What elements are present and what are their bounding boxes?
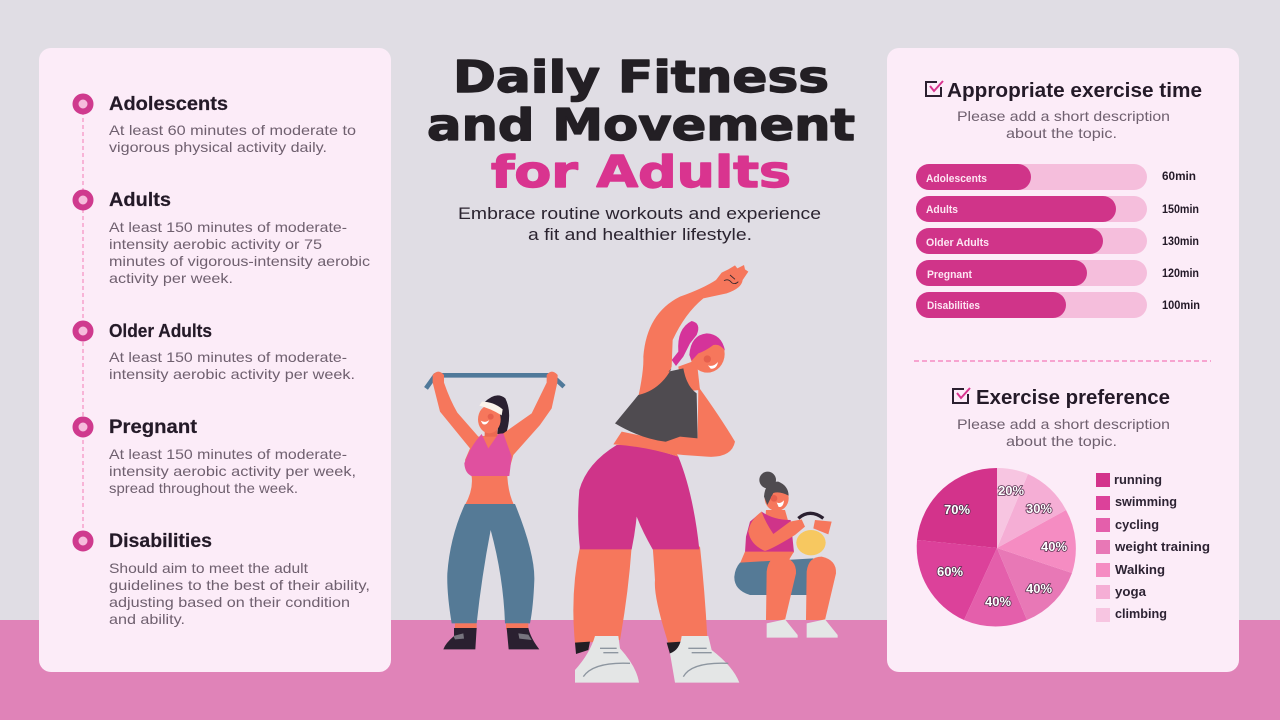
pie chart: exercise preference: 40% [985,594,1011,609]
guideline: Adults [76,190,370,286]
guideline: Pregnant: At least 150 minutes of moderate- [109,446,347,462]
description: exercise time: about the topic. [1006,125,1117,141]
guideline: Older Adults [76,321,355,382]
guideline: Pregnant: spread throughout the week. [109,480,298,496]
description: exercise time: Please add a short description [957,108,1170,124]
bar chart: exercise minutes: Pregnant [927,269,972,281]
guideline: Adults: minutes of vigorous-intensity aerobic [109,253,370,269]
guideline: Adolescents: Adolescents [109,94,228,115]
legend: exercise types: weight training [1114,539,1210,554]
guideline: Older Adults: intensity aerobic activity per week. [109,366,355,382]
guideline: Disabilities: guidelines to the best of their ability, [109,577,370,593]
guideline: Pregnant [76,417,356,496]
legend: exercise types: cycling [1115,517,1159,532]
pie chart: exercise preference: 40% [1041,539,1067,554]
figure: woman side-stretching [573,265,748,683]
guideline: Adults: activity per week. [109,270,233,286]
pie chart: exercise preference: 40% [1026,581,1052,596]
legend: exercise types: yoga [1115,584,1147,599]
bar chart: exercise minutes: Adolescents [926,173,987,185]
legend: exercise types [1096,472,1210,622]
description: exercise time [957,108,1170,141]
guideline: Disabilities: Should aim to meet the adult [109,560,308,576]
guideline: Disabilities: and ability. [109,611,185,627]
heading: appropriate exercise time: Appropriate exercise time [947,79,1202,102]
guideline: Pregnant: Pregnant [109,417,198,438]
guideline: Disabilities: Disabilities [109,531,212,552]
panel: right charts [887,48,1239,672]
bar chart: exercise minutes: Adults [926,204,958,216]
illustration: three women exercising [426,265,838,683]
figure: woman squatting with kettlebell [734,472,838,638]
bar chart: exercise minutes: Older Adults [926,237,989,249]
guideline: Adolescents: vigorous physical activity daily. [109,139,327,155]
bar chart: exercise minutes: 100min [1162,300,1200,312]
title: for Adults [491,147,791,198]
bar chart: exercise minutes: 120min [1162,268,1199,280]
guideline: Adults: Adults [109,190,171,211]
pie chart: exercise preference: 60% [937,564,963,579]
pie chart: exercise preference: 70% [944,502,970,517]
guideline: Older Adults: Older Adults [109,321,212,341]
guideline: Adults: intensity aerobic activity or 75 [109,236,322,252]
pie chart: exercise preference: 20% [998,483,1024,498]
guideline: Adolescents: At least 60 minutes of moderate to [109,122,356,138]
heading: exercise preference: Exercise preference [976,386,1170,409]
legend: exercise types: climbing [1115,606,1167,621]
guideline: Adolescents [76,94,356,155]
guideline: Disabilities [76,531,370,627]
figure: woman lifting a bar [426,372,564,649]
description: exercise preference: Please add a short description [957,416,1170,432]
bar chart: exercise minutes: 60min [1162,171,1196,183]
icon: checkbox [953,388,970,403]
title: Daily Fitness [453,52,829,103]
icon: checkbox [926,81,943,96]
guideline: Disabilities: adjusting based on their condition [109,594,350,610]
bar chart: exercise minutes: Disabilities [927,300,980,312]
bar chart: exercise minutes: 150min [1162,204,1199,216]
legend: exercise types: Walking [1115,562,1165,577]
subtitle [458,204,821,244]
guideline: Adults: At least 150 minutes of moderate- [109,219,347,235]
pie chart: exercise preference: 30% [1026,501,1052,516]
bar chart: exercise minutes [916,164,1200,318]
panel: audience guidelines [39,48,391,672]
subtitle: a fit and healthier lifestyle. [528,225,752,244]
description: exercise preference [957,416,1170,449]
guideline: Pregnant: intensity aerobic activity per week, [109,463,356,479]
subtitle: Embrace routine workouts and experience [458,204,821,223]
guideline: Older Adults: At least 150 minutes of moderate- [109,349,347,365]
description: exercise preference: about the topic. [1006,433,1117,449]
pie chart: exercise preference [917,468,1076,626]
title [427,52,855,198]
bar chart: exercise minutes: 130min [1162,236,1199,248]
legend: exercise types: running [1114,472,1162,487]
legend: exercise types: swimming [1115,494,1177,509]
title: and Movement [427,100,855,151]
